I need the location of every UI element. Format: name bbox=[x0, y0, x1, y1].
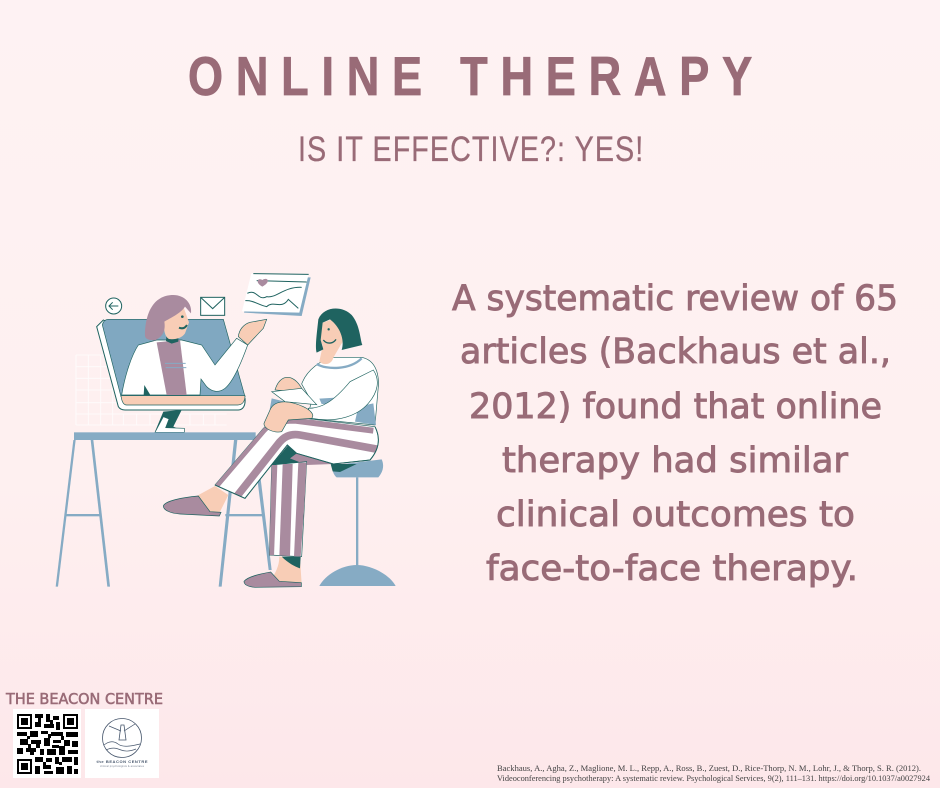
body text block: therapy had similar bbox=[502, 441, 849, 481]
desk bbox=[56, 432, 272, 587]
monitor bbox=[97, 295, 267, 432]
standing shoe bbox=[244, 572, 301, 587]
stool bbox=[319, 459, 396, 586]
icon: faint grid behind monitor bbox=[76, 355, 227, 425]
face bbox=[163, 307, 189, 339]
brand label: THE BEACON CENTRE bbox=[5, 690, 163, 708]
therapist hand bbox=[238, 319, 267, 345]
crossed foot bbox=[197, 486, 228, 515]
monitor frame bbox=[97, 320, 245, 410]
neck bbox=[166, 333, 178, 344]
title: ONLINE THERAPY bbox=[188, 45, 752, 107]
crossed leg bbox=[215, 417, 382, 498]
patient bbox=[163, 309, 382, 587]
body text block: clinical outcomes to bbox=[496, 495, 855, 535]
illustration: online therapy session bbox=[56, 273, 396, 587]
QR code bbox=[13, 709, 81, 778]
Beacon Centre logo: the BEACON CENTRE bbox=[96, 759, 148, 764]
notepad bbox=[272, 388, 317, 405]
therapist bbox=[122, 295, 267, 395]
icon: envelope bbox=[201, 297, 225, 315]
body text block bbox=[452, 279, 898, 589]
Beacon Centre logo: clinical psychologists & associates bbox=[100, 765, 145, 768]
icon: back arrow button bbox=[106, 298, 122, 314]
standing leg bbox=[244, 445, 333, 587]
monitor base strip bbox=[121, 396, 245, 405]
knee and hands bbox=[269, 398, 285, 417]
body text block: 2012) found that online bbox=[469, 387, 882, 427]
body text block: A systematic review of 65 bbox=[452, 279, 898, 319]
torso bbox=[302, 357, 378, 425]
monitor screen bbox=[102, 319, 245, 397]
body text block: face-to-face therapy. bbox=[486, 549, 858, 589]
scarf bbox=[157, 340, 187, 395]
monitor stand bbox=[155, 410, 184, 432]
citation: Backhaus, A., Agha, Z., Maglione, M. L., Repp, A., Ross, B., Zuest, D., Rice-Thorp, N. M., Lohr, J., & Thorp, S. R. (2012). bbox=[497, 764, 921, 773]
standing foot bbox=[271, 557, 302, 584]
Beacon Centre logo bbox=[85, 709, 159, 778]
icon: chart card bbox=[242, 273, 311, 316]
subtitle: IS IT EFFECTIVE?: YES! bbox=[298, 129, 643, 169]
citation bbox=[497, 764, 931, 783]
neck and head bbox=[319, 343, 342, 364]
citation: Videoconferencing psychotherapy: A systematic review. Psychological Services, 9(2), 111–131. https://doi.org/10.1037/a0027924 bbox=[497, 774, 931, 783]
body text block: articles (Backhaus et al., bbox=[460, 332, 891, 372]
hair bbox=[145, 295, 191, 340]
coat bbox=[122, 338, 248, 395]
